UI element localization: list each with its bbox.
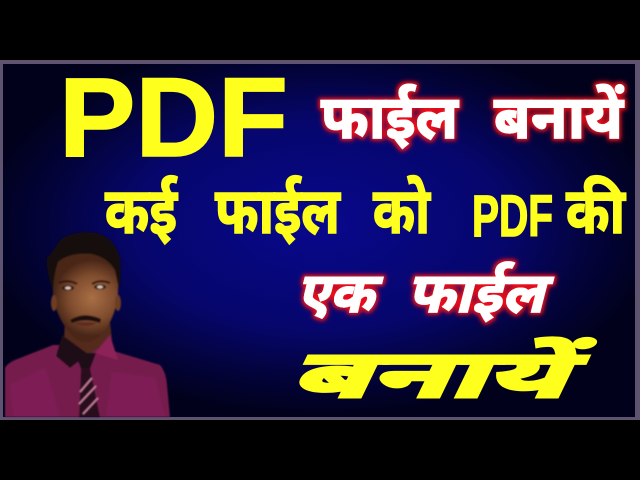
tie <box>79 368 100 417</box>
mouth <box>74 322 97 326</box>
text line: one file: फाईल <box>407 261 554 324</box>
face <box>53 252 118 342</box>
text line: many files to PDF: फाईल <box>215 175 341 247</box>
hair <box>47 232 121 290</box>
ears <box>51 295 57 311</box>
text line: one file <box>297 261 554 324</box>
text line: many files to PDF <box>105 175 626 249</box>
eyes <box>62 286 74 290</box>
text line: many files to PDF: को <box>373 175 431 247</box>
background panel <box>3 64 635 417</box>
heading: file banayen: फाईल <box>321 84 460 151</box>
shirt highlight <box>10 368 165 417</box>
text line: many files to PDF: PDF <box>472 184 553 249</box>
text line: many files to PDF: कई <box>105 175 178 247</box>
eyebrows <box>59 281 110 284</box>
collar <box>95 335 118 360</box>
portrait of man <box>5 232 170 417</box>
tie stripes <box>79 378 98 414</box>
frame border <box>0 60 640 420</box>
neck <box>64 322 112 356</box>
shirt <box>5 345 170 417</box>
heading: file banayen <box>321 84 624 151</box>
heading: PDF: PDF <box>59 55 288 180</box>
text line: banayen: बनायें <box>290 337 595 411</box>
dark collar shadow <box>56 335 88 368</box>
tie knot <box>75 353 96 369</box>
heading: file banayen: बनायें <box>494 84 624 151</box>
text line: many files to PDF: की <box>566 175 626 247</box>
text line: one file: एक <box>297 261 384 324</box>
moustache <box>70 315 101 323</box>
